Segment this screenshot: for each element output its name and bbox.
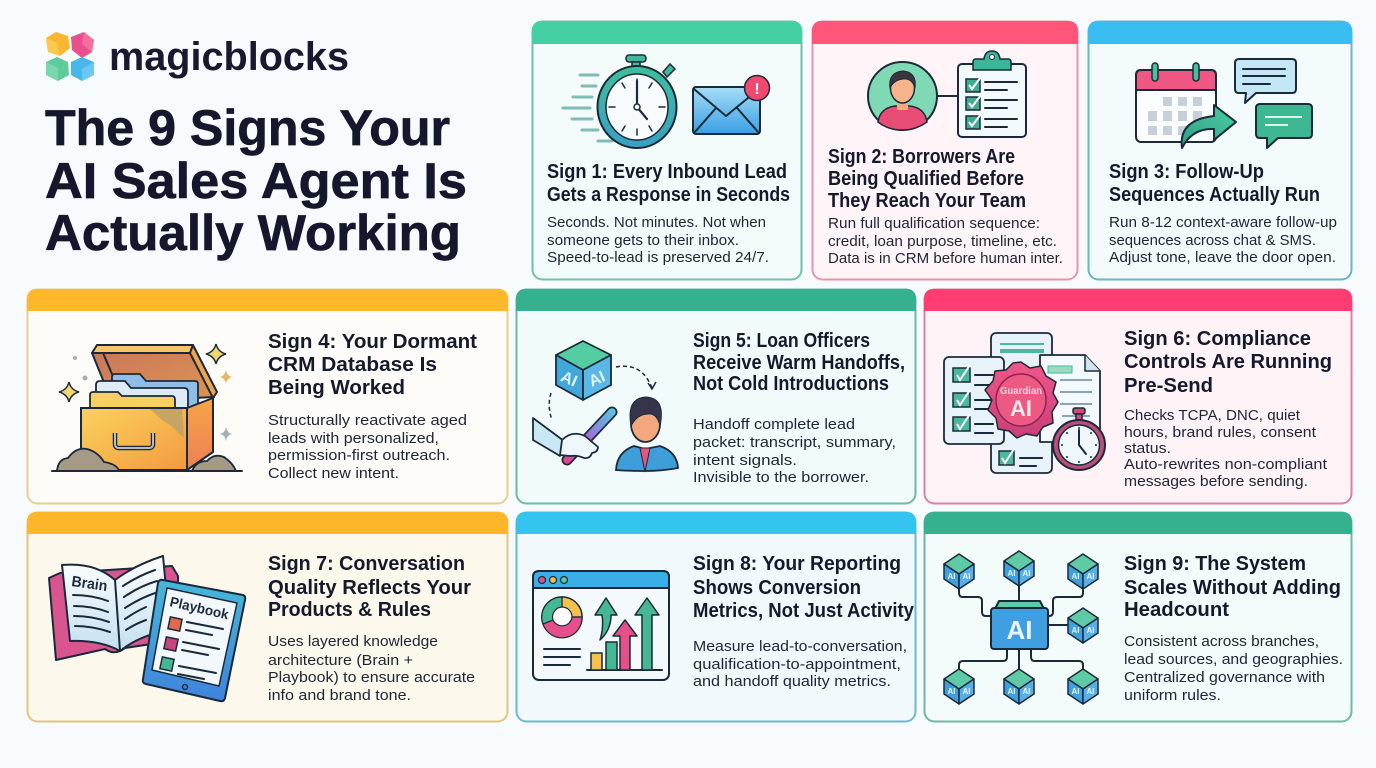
body text: Invisible to the borrower. xyxy=(693,469,869,486)
heading: Being Worked xyxy=(268,377,405,399)
heading xyxy=(268,553,471,621)
heading xyxy=(1124,328,1332,397)
body text: architecture (Brain + xyxy=(268,652,413,669)
agent cube 7 xyxy=(1068,669,1098,704)
panel: sign 8 xyxy=(516,512,916,722)
heading: Sign 8: Your Reporting xyxy=(693,553,901,575)
agent cube 1: AI xyxy=(962,572,970,581)
agent cube 5 xyxy=(944,669,974,704)
heading xyxy=(547,161,790,206)
header bar xyxy=(812,21,1078,44)
heading: Sign 1: Every Inbound Lead xyxy=(547,161,787,183)
header bar xyxy=(1088,21,1352,44)
body text: info and brand tone. xyxy=(268,687,411,704)
icon: central AI cube connected to seven agents xyxy=(944,551,1098,704)
heading: Sign 2: Borrowers Are xyxy=(828,146,1015,168)
body text: Checks TCPA, DNC, quiet xyxy=(1124,407,1301,424)
agent cube 6: AI xyxy=(1022,687,1030,696)
body text: Handoff complete lead xyxy=(693,416,855,433)
panel: sign 6 xyxy=(924,289,1352,504)
agent cube 3 xyxy=(1068,554,1098,589)
body text: Auto-rewrites non-compliant xyxy=(1124,456,1328,473)
panel: sign 7 xyxy=(27,512,508,722)
body text xyxy=(547,214,769,266)
body text: permission-first outreach. xyxy=(268,447,450,464)
body text xyxy=(268,633,475,704)
body text: uniform rules. xyxy=(1124,687,1221,704)
header bar xyxy=(924,512,1352,534)
heading: Products & Rules xyxy=(268,599,431,621)
body text: Measure lead-to-conversation, xyxy=(693,638,907,655)
body text: lead sources, and geographies. xyxy=(1124,651,1343,668)
heading: Sign 9: The System xyxy=(1124,553,1306,575)
panel: sign 2 xyxy=(812,21,1078,280)
body text: sequences across chat & SMS. xyxy=(1109,232,1316,249)
icon: compliance documents, Guardian AI seal and stopwatch: Guardian xyxy=(1000,386,1042,397)
heading: Sign 7: Conversation xyxy=(268,553,465,575)
panel: sign 9 xyxy=(924,512,1352,722)
heading: Quality Reflects Your xyxy=(268,577,471,599)
heading: Shows Conversion xyxy=(693,577,861,599)
body text: packet: transcript, summary, xyxy=(693,434,896,451)
icon: AI cube handing baton to loan officer xyxy=(533,341,678,472)
agent cube 6 xyxy=(1004,669,1034,704)
agent cube 3: AI xyxy=(1072,572,1080,581)
agent cube 6: AI xyxy=(1008,687,1016,696)
header bar xyxy=(27,512,508,534)
heading: Sign 5: Loan Officers xyxy=(693,330,870,352)
heading xyxy=(268,331,477,399)
heading xyxy=(828,146,1026,212)
header bar xyxy=(516,289,916,311)
brand name: magicblocks xyxy=(109,35,349,79)
body text: Seconds. Not minutes. Not when xyxy=(547,214,766,231)
body text xyxy=(268,412,467,482)
body text: and handoff quality metrics. xyxy=(693,673,891,690)
icon: compliance documents, Guardian AI seal and stopwatch xyxy=(944,333,1105,473)
icon: calendar, arrow and chat bubbles xyxy=(1136,59,1312,148)
title: The 9 Signs Your xyxy=(45,100,450,156)
body text: hours, brand rules, consent xyxy=(1124,424,1317,441)
body text: someone gets to their inbox. xyxy=(547,232,739,249)
heading: Receive Warm Handoffs, xyxy=(693,352,905,374)
panel: sign 1 xyxy=(532,21,802,280)
body text: Centralized governance with xyxy=(1124,669,1325,686)
body text: Run 8-12 context-aware follow-up xyxy=(1109,214,1337,231)
agent cube 5: AI xyxy=(962,687,970,696)
heading: Being Qualified Before xyxy=(828,168,1024,190)
body text xyxy=(1124,633,1343,704)
heading: Sequences Actually Run xyxy=(1109,184,1320,206)
icon: Brain book and Playbook tablet: Playbook xyxy=(168,593,231,622)
body text xyxy=(1124,407,1328,490)
heading xyxy=(693,553,915,622)
heading: Pre-Send xyxy=(1124,375,1213,397)
agent cube 2: AI xyxy=(1008,569,1016,578)
header bar xyxy=(27,289,508,311)
agent cube 1 xyxy=(944,554,974,589)
body text: Adjust tone, leave the door open. xyxy=(1109,249,1336,266)
header bar xyxy=(516,512,916,534)
heading: Sign 6: Compliance xyxy=(1124,328,1311,350)
body text: Data is in CRM before human inter. xyxy=(828,250,1063,267)
body text xyxy=(693,416,896,486)
title xyxy=(45,100,467,261)
heading xyxy=(1124,553,1341,621)
icon: stopwatch and envelope: ! xyxy=(754,81,760,98)
agent cube 1: AI xyxy=(948,572,956,581)
heading: They Reach Your Team xyxy=(828,190,1026,212)
body text xyxy=(828,215,1063,267)
icon: conversion dashboard xyxy=(533,571,669,680)
heading xyxy=(1109,161,1320,206)
body text: status. xyxy=(1124,440,1171,457)
icon: compliance documents, Guardian AI seal and stopwatch: AI xyxy=(1010,396,1032,421)
panel: sign 4 xyxy=(27,289,508,504)
header bar xyxy=(532,21,802,44)
body text: leads with personalized, xyxy=(268,430,439,447)
icon: AI cube handing baton to loan officer: AI xyxy=(558,368,580,390)
heading: CRM Database Is xyxy=(268,354,437,376)
heading: Headcount xyxy=(1124,599,1229,621)
heading: Controls Are Running xyxy=(1124,351,1332,373)
icon: central AI cube connected to seven agents: AI xyxy=(1006,615,1032,645)
body text: messages before sending. xyxy=(1124,473,1308,490)
body text: Collect new intent. xyxy=(268,465,399,482)
icon: Brain book and Playbook tablet: Brain xyxy=(70,573,108,595)
panel: sign 3 xyxy=(1088,21,1352,280)
heading: Scales Without Adding xyxy=(1124,577,1341,599)
agent cube 7: AI xyxy=(1072,687,1080,696)
body text: credit, loan purpose, timeline, etc. xyxy=(828,233,1057,250)
icon: four coloured blocks xyxy=(46,32,94,81)
agent cube 4 xyxy=(1068,608,1098,643)
icon: borrower and checklist xyxy=(868,51,1026,137)
icon: stopwatch and envelope xyxy=(563,55,770,148)
agent cube 5: AI xyxy=(948,687,956,696)
body text: Run full qualification sequence: xyxy=(828,215,1040,232)
panel: sign 5 xyxy=(516,289,916,504)
agent cube 2 xyxy=(1004,551,1034,586)
header bar xyxy=(924,289,1352,311)
heading: Not Cold Introductions xyxy=(693,373,889,395)
body text xyxy=(693,638,907,690)
logo: magicblocks xyxy=(46,32,349,81)
body text xyxy=(1109,214,1337,266)
title: AI Sales Agent Is xyxy=(45,153,467,209)
title: Actually Working xyxy=(45,205,461,261)
body text: Speed-to-lead is preserved 24/7. xyxy=(547,249,769,266)
agent cube 4: AI xyxy=(1072,626,1080,635)
icon: dusty CRM file box xyxy=(52,344,242,471)
agent cube 2: AI xyxy=(1022,569,1030,578)
heading: Metrics, Not Just Activity xyxy=(693,600,915,622)
body text: Uses layered knowledge xyxy=(268,633,438,650)
heading: Sign 4: Your Dormant xyxy=(268,331,477,353)
body text: intent signals. xyxy=(693,452,797,469)
heading: Gets a Response in Seconds xyxy=(547,184,790,206)
heading xyxy=(693,330,905,395)
agent cube 4: AI xyxy=(1086,626,1094,635)
body text: qualification-to-appointment, xyxy=(693,656,901,673)
body text: Consistent across branches, xyxy=(1124,633,1319,650)
heading: Sign 3: Follow-Up xyxy=(1109,161,1264,183)
icon: AI cube handing baton to loan officer: AI xyxy=(586,368,608,390)
body text: Playbook) to ensure accurate xyxy=(268,669,475,686)
agent cube 3: AI xyxy=(1086,572,1094,581)
body text: Structurally reactivate aged xyxy=(268,412,467,429)
icon: Brain book and Playbook tablet xyxy=(49,556,245,701)
agent cube 7: AI xyxy=(1086,687,1094,696)
